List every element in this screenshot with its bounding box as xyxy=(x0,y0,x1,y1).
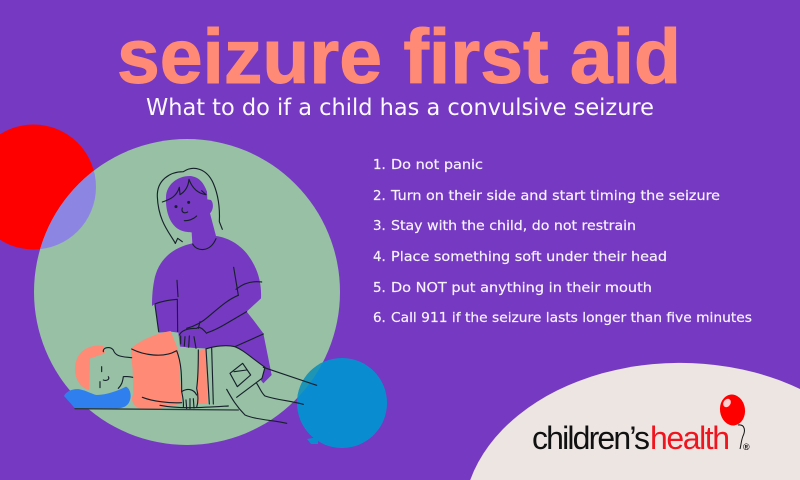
illustration backdrop: green circle xyxy=(34,139,340,445)
step 6: 6. xyxy=(373,311,386,326)
logo: children's health: health xyxy=(650,420,730,456)
pillow xyxy=(64,387,131,408)
red circle overlap xyxy=(40,170,96,249)
logo: children's health xyxy=(532,393,750,456)
logo: children's health: children’s xyxy=(532,420,650,456)
hand xyxy=(179,328,207,348)
shirt xyxy=(131,331,182,409)
icon: red balloon xyxy=(718,393,747,449)
leg band xyxy=(178,350,198,407)
caregiver figure xyxy=(152,168,272,383)
logo: children's health: ® xyxy=(743,442,750,452)
step 2: Turn on their side and start timing the seizure xyxy=(390,189,720,204)
step 1: Do not panic xyxy=(391,158,483,173)
step 1: 1. xyxy=(373,158,386,173)
numbered steps list xyxy=(373,158,752,326)
step 2: 2. xyxy=(373,189,386,204)
step 6: Call 911 if the seizure lasts longer than five minutes xyxy=(391,311,752,326)
step 3: 3. xyxy=(373,219,386,234)
step 5: Do NOT put anything in their mouth xyxy=(391,281,652,296)
shorts xyxy=(206,346,265,405)
step 4: 4. xyxy=(373,250,386,265)
step 5: 5. xyxy=(373,281,386,296)
subtitle: What to do if a child has a convulsive seizure xyxy=(146,95,654,121)
step 4: Place something soft under their head xyxy=(391,250,667,265)
hair xyxy=(75,346,105,390)
title: seizure first aid xyxy=(117,14,681,100)
logo panel: beige ellipse xyxy=(470,363,800,480)
decorative circle: red xyxy=(0,124,96,250)
illustration: caregiver and child xyxy=(64,168,317,423)
decorative balloon: blue xyxy=(297,358,387,448)
step 3: Stay with the child, do not restrain xyxy=(391,219,636,234)
patient figure xyxy=(64,322,317,423)
